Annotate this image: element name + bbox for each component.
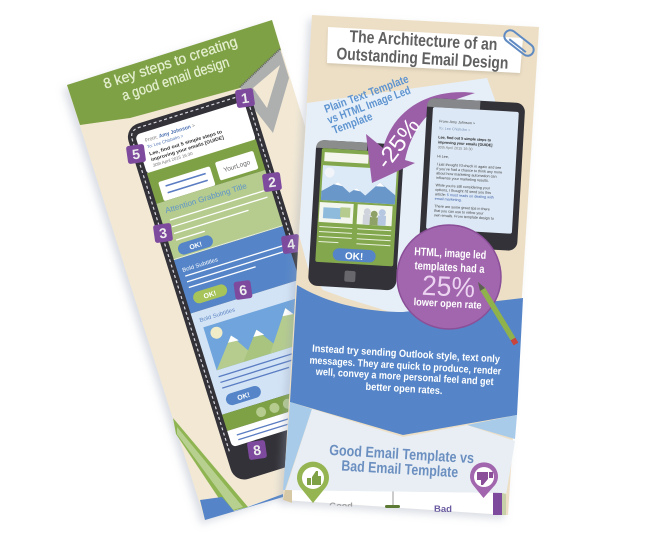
dark green band <box>147 139 265 204</box>
callout circle: 25 percent: 25% <box>421 270 476 303</box>
blue OK button: OK! <box>237 392 251 402</box>
email header: 30th April 2015 16:30 <box>152 151 194 168</box>
section heading: plain text vs html: vs HTML Image Led <box>326 85 412 127</box>
badge 5 <box>126 144 146 164</box>
blue lines <box>218 345 324 389</box>
light blue corner right <box>467 415 517 439</box>
body paragraph: Instead try sending Outlook style, text only <box>312 344 500 365</box>
OK button: OK! <box>189 241 203 252</box>
heading: 8 key steps to creating <box>101 34 240 93</box>
email text: article: 5 must reads on dealing with <box>435 192 494 200</box>
footer <box>227 397 341 447</box>
paper sheet <box>299 78 495 315</box>
phone body <box>419 98 525 251</box>
card background <box>283 15 539 515</box>
screen <box>315 148 400 266</box>
email screen <box>426 107 519 234</box>
white lines <box>185 243 292 288</box>
attention title: Attention Grabbing Title <box>164 181 248 215</box>
phone top highlight <box>427 98 480 110</box>
comparison table: Good <box>329 501 353 511</box>
section heading: plain text vs html: Template <box>331 111 374 137</box>
badge 8 <box>247 440 267 460</box>
icon: pencil <box>478 282 516 344</box>
OK button <box>332 248 376 264</box>
arrow: -25 percent <box>366 92 475 183</box>
email header <box>135 101 256 175</box>
subtitle 2: Bold Subtitles <box>199 307 236 324</box>
light green section <box>156 170 283 260</box>
bottom blue strip <box>200 494 283 520</box>
blue section <box>174 226 299 314</box>
image card right <box>357 204 393 226</box>
text template phone <box>419 98 525 251</box>
light blue corner left <box>283 402 312 490</box>
box with lines <box>158 166 216 201</box>
blue OK button <box>224 384 262 407</box>
email text: Hi Lee, <box>437 154 449 159</box>
mountain image <box>203 296 318 370</box>
email text: options, I thought I'd send you this <box>435 188 491 195</box>
email header: From: Amy Johnson > <box>144 123 196 144</box>
light blue section <box>191 280 331 415</box>
image card left <box>319 202 354 224</box>
icon: ruler <box>173 418 248 512</box>
badge 2 <box>262 172 282 192</box>
callout circle: 25 percent: templates had a <box>414 260 485 276</box>
title strip: Outstanding Email Design <box>336 44 509 73</box>
section heading: plain text vs html <box>323 73 412 137</box>
body paragraph <box>308 344 502 400</box>
icon: paperclip <box>502 28 536 58</box>
email header: To: Lee Chisholm > <box>146 133 184 149</box>
logo box: YourLogo <box>223 159 252 174</box>
body paragraph: better open rates. <box>365 382 443 397</box>
logo box <box>215 151 259 181</box>
section heading: good vs bad: Good Email Template vs <box>329 442 474 467</box>
callout circle: 25 percent: HTML, image led <box>414 246 486 262</box>
email text: own emails. From template design to <box>434 213 494 221</box>
OK button <box>176 234 214 256</box>
badge 4: 4 <box>286 236 296 252</box>
email text: that you can use to refine your <box>434 209 484 216</box>
hero image <box>321 165 397 204</box>
body paragraph: messages. They are quick to produce, render <box>309 355 501 378</box>
icon: green thumbs up pin <box>297 462 329 503</box>
panel: left card, 8 key steps <box>67 20 400 520</box>
badge 3 <box>153 223 173 243</box>
section heading: good vs bad: Bad Email Template <box>341 458 459 481</box>
email header: Lee, find out 5 simple steps to <box>149 129 223 157</box>
badge 2: 2 <box>267 174 277 190</box>
email text: To: Lee Chisholm > <box>439 126 471 132</box>
lime OK button <box>192 283 229 305</box>
badge 1 <box>235 88 255 108</box>
blue text panel <box>290 285 523 435</box>
comparison table: Bad <box>434 504 452 515</box>
email text: improving your emails [GUIDE] <box>438 140 493 148</box>
body paragraph: well, convey a more personal feel and get <box>315 367 494 388</box>
panel: right card, architecture <box>283 15 539 515</box>
green social bar <box>222 381 336 431</box>
callout circle: 25 percent: lower open rate <box>413 296 482 312</box>
badge 8: 8 <box>252 442 262 458</box>
email header: improving your emails [GUIDE] <box>150 135 225 163</box>
email text: There are some great tips in there <box>434 204 490 211</box>
icon: purple thumbs down pin <box>470 462 498 498</box>
badge 3: 3 <box>158 225 168 241</box>
email text: email marketing. <box>435 197 462 202</box>
comparison table <box>283 490 509 515</box>
lime OK button: OK! <box>203 290 217 301</box>
arrow: -25 percent: -25% <box>370 113 425 173</box>
card background <box>67 20 400 520</box>
title strip: The Architecture of an <box>349 27 498 54</box>
subtitle: Bold Subtitles <box>182 257 219 274</box>
email text: From: Amy Johnson > <box>439 119 475 125</box>
email text: if you've had a chance to think any more <box>436 167 502 175</box>
home button <box>344 271 356 282</box>
text lines <box>318 226 391 246</box>
body lines <box>170 190 272 241</box>
phone top highlight <box>316 140 367 152</box>
green header band <box>67 20 281 125</box>
badge 5: 5 <box>131 146 141 162</box>
dashed stitch <box>129 94 346 451</box>
email text <box>434 119 505 221</box>
email text: While you're still considering your <box>435 183 491 190</box>
section heading: good vs bad <box>328 442 474 482</box>
badge 4 <box>281 234 301 254</box>
badge 6: 6 <box>238 282 248 298</box>
OK button: OK! <box>345 251 364 263</box>
icon: set square <box>240 49 289 133</box>
email text: about how marketing automation can <box>436 171 497 179</box>
section heading: plain text vs html: Plain Text Template <box>323 73 410 116</box>
badge 1: 1 <box>240 90 250 106</box>
phone body <box>124 89 359 483</box>
badge 6 <box>233 280 253 300</box>
left phone with email layout <box>124 89 359 483</box>
infographic mockup <box>62 15 539 525</box>
title strip <box>327 26 523 73</box>
html template phone <box>308 140 404 291</box>
lower paper sheet <box>285 409 515 495</box>
callout circle: 25 percent <box>397 225 501 329</box>
heading: a good email design <box>120 55 232 104</box>
logo bar <box>324 152 369 164</box>
email text: 30th April 2015 16:30 <box>438 145 473 151</box>
email text: influence your marketing results. <box>436 176 489 183</box>
email text: Lee, find out 5 simple steps to <box>438 135 492 142</box>
phone body <box>308 140 404 291</box>
email text: I just thought I'd check in again and see <box>437 162 501 170</box>
